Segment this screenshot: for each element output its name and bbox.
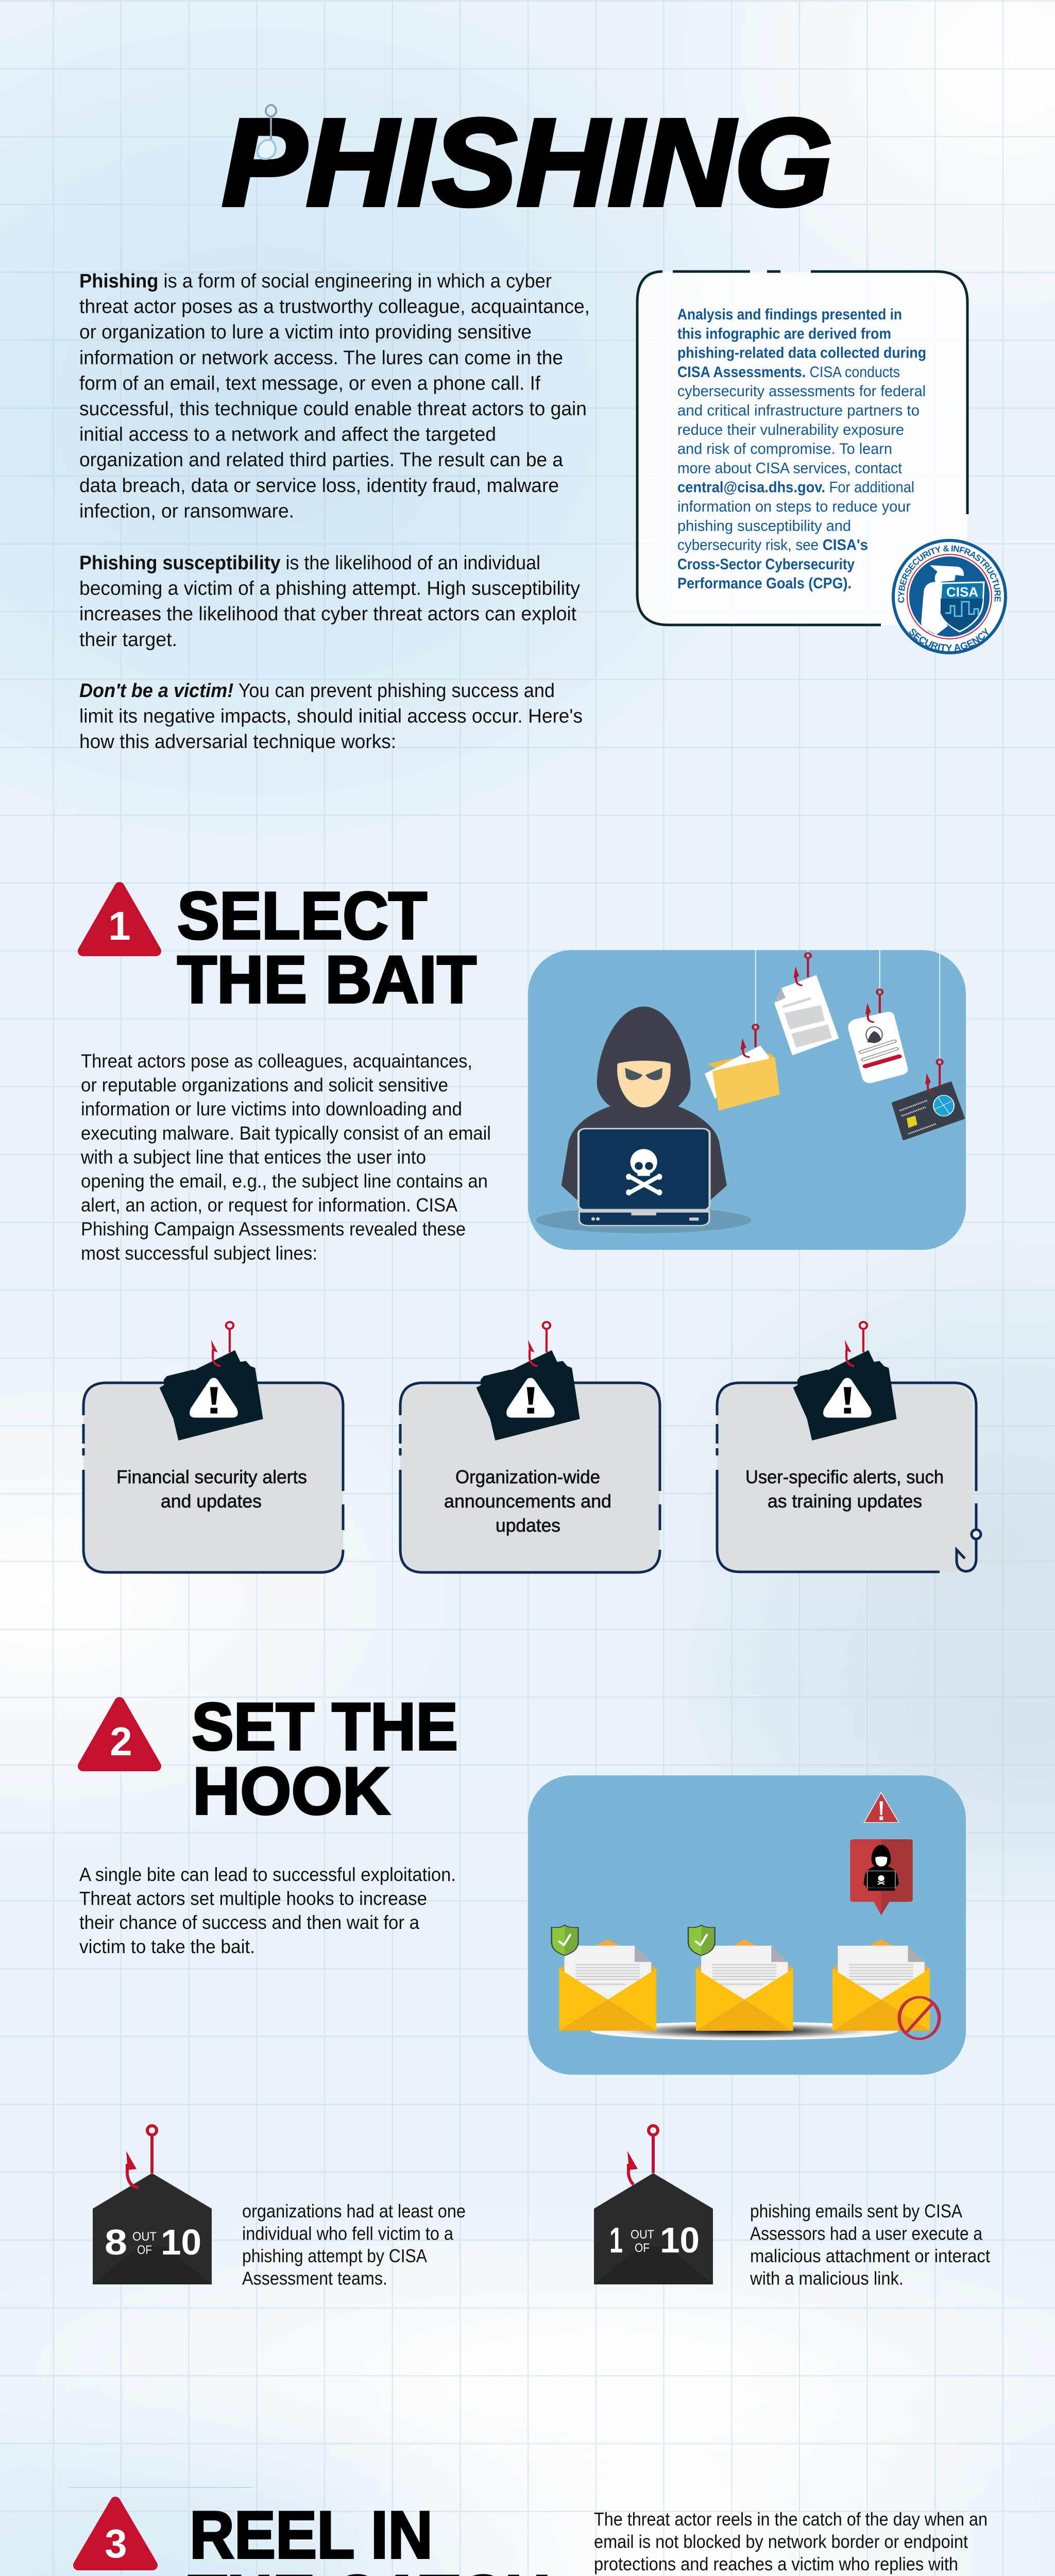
text block: note copy: information on steps to reduce your: [677, 498, 911, 515]
card: user-specific alerts: as training updates: [768, 1490, 922, 1512]
heading: set the hook: [192, 1689, 458, 1828]
paragraph: phishing susceptibility: becoming a victim of a phishing attempt. High susceptibility: [79, 578, 580, 600]
text block: note copy: CISA Assessments. CISA conducts: [677, 364, 900, 381]
stat: 8 out of 10: [93, 2126, 466, 2289]
bait: document: [774, 975, 839, 1055]
laptop with skull: [578, 1129, 710, 1226]
paragraph: don't be a victim: how this adversarial technique works:: [79, 731, 396, 753]
paragraph: definition of phishing: threat actor poses as a trustworthy colleague, acquaintance,: [79, 296, 590, 318]
text block: hook description: A single bite can lead to successful exploitation.: [79, 1864, 456, 1885]
icon: envelope hook with 8 out of 10: 8: [105, 2222, 127, 2262]
bait: login card: [848, 1012, 908, 1083]
icon: envelope hook with 1 out of 10: [594, 2126, 713, 2284]
icon: envelope hook with 1 out of 10: OF: [635, 2241, 650, 2255]
text block: phishing emails stat: malicious attachment or interact: [750, 2245, 990, 2266]
text block: bait description: with a subject line that entices the user into: [80, 1146, 426, 1167]
icon: step 3 badge: 3: [105, 2521, 127, 2566]
text block: reel description: protections and reaches a victim who replies with: [594, 2553, 958, 2574]
text block: reel description: [594, 2509, 988, 2576]
paragraph: phishing susceptibility: their target.: [79, 629, 177, 651]
section 1: select the bait: [80, 878, 966, 1264]
subject line cards: [83, 1322, 981, 1572]
text block: bait description: [80, 1050, 491, 1264]
icon: alert tag and hook: [793, 1322, 897, 1440]
card: organization-wide announcements: announcements and: [444, 1490, 611, 1512]
icon: CISA seal: CYBERSECURITY & INFRASTRUCTURE: [898, 545, 1001, 603]
paragraph: phishing susceptibility: Phishing susceptibility is the likelihood of an individual: [79, 552, 540, 574]
icon: envelope hook with 8 out of 10: 10: [161, 2222, 201, 2262]
bait: credit card: [893, 1082, 964, 1139]
icon: CISA seal: CISA: [946, 584, 978, 600]
text block: reel description: The threat actor reels in the catch of the day when an: [594, 2509, 988, 2530]
text block: hook description: their chance of success and then wait for a: [79, 1912, 419, 1933]
card: organization-wide announcements: [400, 1322, 660, 1572]
icon: CISA seal: [892, 539, 1007, 654]
hooks: [741, 953, 943, 1092]
text block: hook description: victim to take the bait.: [79, 1936, 255, 1957]
icon: envelope hook with 8 out of 10: OF: [137, 2243, 152, 2257]
envelope 2 with shield: [688, 1925, 793, 2031]
text block: phishing emails stat: Assessors had a user execute a: [750, 2223, 983, 2244]
panel: CISA assessments note: [637, 272, 967, 625]
heading: select the bait: [177, 878, 477, 1017]
icon: prohibited sign: [899, 1997, 939, 2039]
text block: hook description: Threat actors set multiple hooks to increase: [79, 1888, 427, 1909]
text block: note copy: Cross-Sector Cybersecurity: [677, 556, 855, 573]
bait: folder: [705, 1045, 780, 1111]
text block: phishing emails stat: with a malicious link.: [750, 2268, 904, 2289]
paragraph: definition of phishing: data breach, data or service loss, identity fraud, malware: [79, 475, 559, 497]
shield: [940, 582, 984, 632]
heading: set the hook: SET THE: [192, 1689, 458, 1764]
text block: organizations stat: phishing attempt by CISA: [242, 2245, 427, 2266]
icon: warning triangle: [864, 1792, 899, 1822]
text block: bait description: Phishing Campaign Assessments revealed these: [81, 1218, 466, 1240]
card: financial security alerts: and updates: [161, 1490, 262, 1512]
text block: hook description: [79, 1864, 456, 1957]
icon: red hacker marker: [850, 1839, 913, 1916]
heading: reel in the catch of the day: [188, 2497, 564, 2576]
text block: bait description: opening the email, e.g., the subject line contains an: [81, 1171, 488, 1192]
text block: bait description: Threat actors pose as colleagues, acquaintances,: [81, 1050, 472, 1072]
section 3: reel in the catch of the day: [53, 2487, 996, 2576]
paragraph: definition of phishing: information or network access. The lures can come in the: [79, 347, 563, 369]
icon: navy hook at card corner: [957, 1503, 981, 1571]
card: financial security alerts: [83, 1322, 343, 1572]
text block: organizations stat: individual who fell victim to a: [242, 2223, 454, 2244]
text block: note copy: cybersecurity risk, see CISA's: [677, 537, 868, 554]
icon: envelope hook with 1 out of 10: 10: [660, 2220, 700, 2260]
envelope 3 blocked: [832, 1939, 930, 2031]
paragraph: definition of phishing: or organization to lure a victim into providing sensitive: [79, 321, 532, 343]
text block: organizations stat: Assessment teams.: [242, 2268, 387, 2289]
eagle: [930, 565, 964, 582]
icon: alert tag and hook: [477, 1322, 580, 1440]
text block: phishing emails stat: phishing emails sent by CISA: [750, 2200, 962, 2222]
text block: note copy: this infographic are derived from: [677, 325, 891, 342]
text block: note copy: reduce their vulnerability exposure: [677, 421, 904, 438]
paragraph: definition of phishing: Phishing is a form of social engineering in which a cyber: [79, 270, 552, 292]
icon: envelope hook with 8 out of 10: [93, 2126, 212, 2284]
paragraph: phishing susceptibility: [79, 552, 580, 651]
stat: 1 out of 10: [594, 2126, 990, 2289]
section 2: set the hook: [79, 1689, 990, 2289]
paragraph: phishing susceptibility: increases the likelihood that cyber threat actors can exploit: [79, 603, 576, 625]
paragraph: definition of phishing: [79, 270, 590, 522]
text block: bait description: alert, an action, or request for information. CISA: [81, 1195, 457, 1216]
fishing lines: [756, 950, 940, 1059]
text block: bait description: or reputable organizations and solicit sensitive: [81, 1075, 448, 1096]
envelope 1 with shield: [552, 1925, 656, 2031]
icon: envelope hook with 1 out of 10: 1: [609, 2220, 623, 2260]
icon: envelope hook with 8 out of 10: OUT: [132, 2230, 157, 2244]
text block: bait description: most successful subject lines:: [81, 1243, 317, 1264]
intro text: [79, 270, 590, 753]
heading: set the hook: HOOK: [193, 1753, 390, 1828]
icon: envelope hook with 1 out of 10: OUT: [631, 2228, 654, 2242]
paragraph: don't be a victim: [79, 680, 583, 753]
icon: step 1 badge: 1: [108, 903, 131, 948]
text block: bait description: information or lure victims into downloading and: [81, 1098, 462, 1120]
text block: note copy: more about CISA services, contact: [677, 460, 903, 477]
icon: step 2 badge: [83, 1702, 156, 1766]
icon: title fish hook: [258, 105, 276, 159]
icon: step 2 badge: 2: [110, 1719, 132, 1764]
paragraph: definition of phishing: initial access to a network and affect the targeted: [79, 424, 496, 446]
text block: note copy: and critical infrastructure partners to: [677, 402, 920, 419]
text block: note copy: phishing susceptibility and: [677, 517, 851, 534]
icon: step 1 badge: [83, 887, 156, 951]
text block: reel description: email is not blocked by network border or endpoint: [594, 2531, 968, 2552]
shadow: [591, 2022, 898, 2040]
card: organization-wide announcements: updates: [496, 1515, 560, 1536]
card: financial security alerts: Financial security alerts: [116, 1466, 307, 1487]
card: user-specific alerts: User-specific alerts, such: [745, 1466, 944, 1487]
text block: note copy: central@cisa.dhs.gov. For additional: [677, 479, 914, 496]
text block: note copy: Performance Goals (CPG).: [677, 575, 852, 592]
heading: reel in the catch of the day: REEL IN: [190, 2497, 433, 2572]
paragraph: don't be a victim: Don't be a victim! You can prevent phishing success and: [79, 680, 555, 702]
hacker figure: [536, 1007, 752, 1233]
card: organization-wide announcements: Organization-wide: [455, 1466, 600, 1487]
text block: note copy: Analysis and findings presented in: [677, 306, 902, 323]
text block: phishing emails stat: [750, 2200, 990, 2289]
icon: alert tag and hook: [160, 1322, 263, 1440]
text block: note copy: phishing-related data collected during: [677, 345, 926, 362]
paragraph: definition of phishing: successful, this technique could enable threat actors to gain: [79, 398, 587, 420]
icon: step 3 badge: [78, 2502, 152, 2566]
text block: organizations stat: [242, 2200, 466, 2289]
text block: organizations stat: organizations had at least one: [242, 2200, 466, 2222]
paragraph: definition of phishing: infection, or ransomware.: [79, 500, 294, 522]
text block: note copy: and risk of compromise. To learn: [677, 440, 892, 457]
card: user-specific alerts: [717, 1322, 981, 1572]
title: PHISHING: [222, 93, 832, 231]
paragraph: definition of phishing: form of an email, text message, or even a phone call. If: [79, 372, 540, 394]
text block: note copy: [677, 306, 926, 592]
paragraph: definition of phishing: organization and related third parties. The result can be a: [79, 449, 564, 471]
illustration: hacker with hooked baits: [528, 950, 966, 1250]
text block: bait description: executing malware. Bait typically consist of an email: [81, 1123, 491, 1144]
illustration: envelopes with hacker alert: [528, 1775, 966, 2075]
heading: select the bait: SELECT: [177, 878, 427, 953]
text block: note copy: cybersecurity assessments for federal: [677, 383, 926, 400]
paragraph: don't be a victim: limit its negative impacts, should initial access occur. Here's: [79, 706, 583, 727]
icon: CISA seal: SECURITY AGENCY: [909, 628, 989, 651]
heading: select the bait: THE BAIT: [177, 942, 477, 1017]
